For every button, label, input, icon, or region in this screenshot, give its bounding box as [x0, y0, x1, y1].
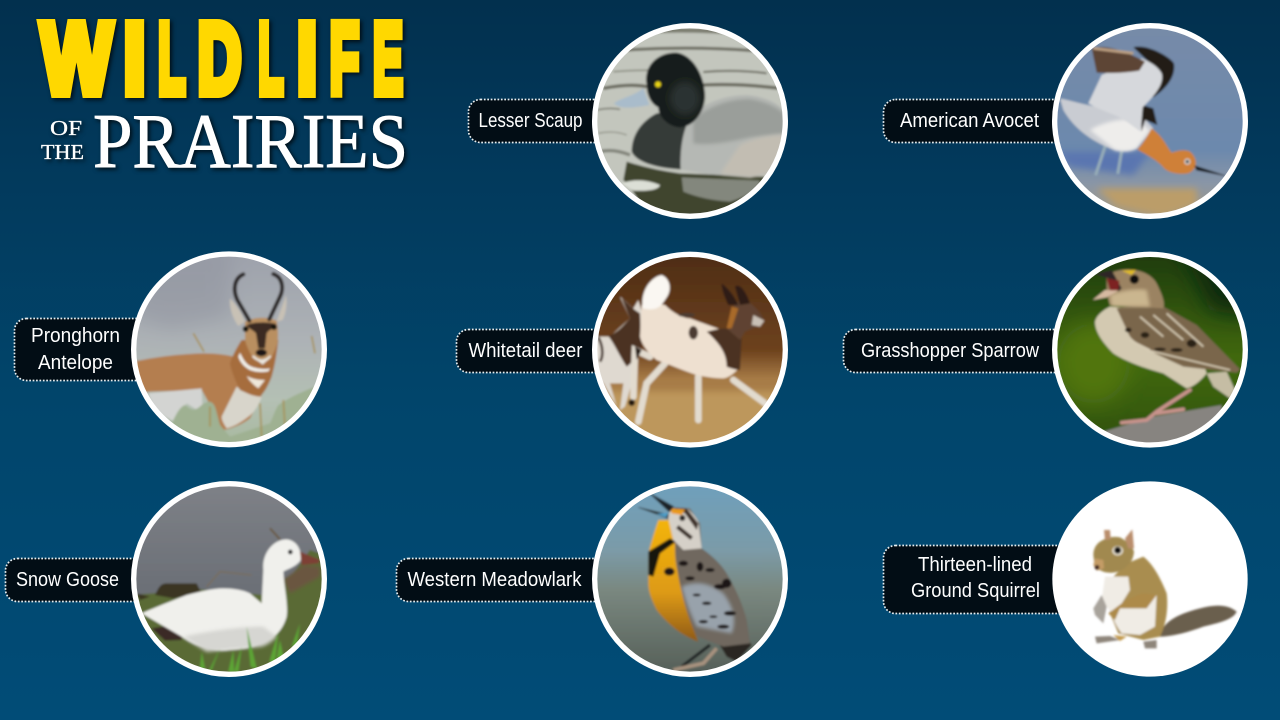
body	[640, 304, 740, 378]
legs	[682, 645, 710, 667]
label: Thirteen-lined Ground Squirrel: Thirteen-lined	[918, 554, 1032, 576]
heading: of the	[41, 116, 84, 164]
horns	[235, 274, 282, 321]
photo: avocet wading	[1050, 20, 1250, 220]
front deer neck and head	[728, 302, 763, 340]
panel: Lesser Scaup	[468, 20, 790, 220]
label: Snow Goose	[6, 558, 166, 602]
tail	[1158, 606, 1237, 637]
photo: white goose on bank	[130, 480, 330, 680]
tail	[1207, 372, 1235, 398]
label: Western Meadowlark	[396, 558, 616, 602]
panel: Whitetail deer	[456, 250, 790, 450]
legs	[1122, 390, 1190, 423]
breast	[632, 113, 687, 169]
photo: squirrel on white	[1052, 481, 1248, 677]
title: E	[373, 3, 403, 115]
heading: PRAIRIES: PRAIRIES	[93, 98, 408, 184]
label: Thirteen-lined Ground Squirrel: Ground Squirrel	[911, 580, 1040, 602]
body	[1060, 99, 1153, 151]
heading: WILDLIFE: I	[297, 3, 317, 115]
label: Whitetail deer: Whitetail deer	[468, 340, 583, 362]
legs	[1096, 147, 1122, 174]
bill	[614, 88, 649, 108]
label: Western Meadowlark: Western Meadowlark	[408, 569, 582, 591]
label: Whitetail deer	[456, 330, 616, 372]
neck	[230, 340, 278, 397]
panel: Snow Goose	[6, 480, 330, 680]
grass blades	[200, 623, 300, 672]
far wing	[1133, 47, 1174, 97]
label: Grasshopper Sparrow: Grasshopper Sparrow	[861, 340, 1039, 362]
label: Grasshopper Sparrow	[844, 330, 1074, 372]
label: Lesser Scaup: Lesser Scaup	[478, 110, 582, 132]
body	[1107, 557, 1167, 640]
heading: of the: THE	[41, 140, 84, 164]
label: Pronghorn Antelope	[14, 318, 164, 380]
legs	[633, 350, 765, 422]
heading: WILDLIFE: W	[41, 3, 112, 115]
panel: Western Meadowlark	[396, 480, 790, 680]
back	[665, 508, 750, 647]
heading: WILDLIFE: I	[124, 3, 146, 115]
tail	[642, 275, 670, 309]
wing	[1117, 306, 1240, 373]
rock	[1104, 403, 1224, 442]
grass	[172, 386, 314, 442]
head	[245, 318, 278, 362]
heading: WILDLIFE: L	[258, 3, 284, 115]
photo: meadowlark singing	[590, 480, 790, 680]
head	[1107, 270, 1164, 308]
label: Pronghorn Antelope: Antelope	[38, 352, 113, 374]
neck and head	[1137, 128, 1196, 174]
rear deer	[593, 297, 643, 410]
tail	[152, 623, 182, 641]
label: Snow Goose: Snow Goose	[16, 569, 119, 591]
photo: pronghorn	[130, 250, 330, 450]
label: American Avocet	[884, 100, 1074, 142]
heading: WILDLIFE: D	[198, 3, 241, 115]
belly	[648, 520, 698, 642]
goose body	[142, 539, 301, 651]
head	[1093, 537, 1134, 573]
title	[41, 3, 408, 184]
grey body	[679, 95, 788, 177]
tail	[717, 637, 752, 662]
body	[133, 353, 262, 430]
panel: Thirteen-lined Ground Squirrel	[884, 481, 1248, 677]
photo: piebald deer running	[590, 250, 790, 450]
photo: sparrow on rock	[1050, 250, 1250, 450]
head	[646, 53, 705, 127]
reflection	[623, 162, 765, 217]
bank	[130, 550, 330, 680]
ears	[230, 295, 287, 326]
panel: Grasshopper Sparrow	[844, 250, 1250, 450]
panel: American Avocet	[884, 20, 1250, 220]
beak	[651, 494, 673, 512]
body	[1095, 307, 1207, 388]
label: Pronghorn Antelope: Pronghorn	[31, 325, 120, 347]
near wing	[1088, 58, 1162, 132]
head	[668, 508, 702, 550]
label: American Avocet: American Avocet	[900, 110, 1039, 132]
label: Lesser Scaup	[468, 100, 618, 142]
label: Thirteen-lined Ground Squirrel	[884, 546, 1084, 614]
panel: Pronghorn Antelope	[14, 250, 330, 450]
heading: WILDLIFE: L	[158, 3, 186, 115]
heading: of the: OF	[50, 116, 82, 140]
photo: duck on water	[590, 20, 790, 220]
heading: WILDLIFE: F	[330, 3, 359, 115]
feet	[1095, 636, 1157, 648]
